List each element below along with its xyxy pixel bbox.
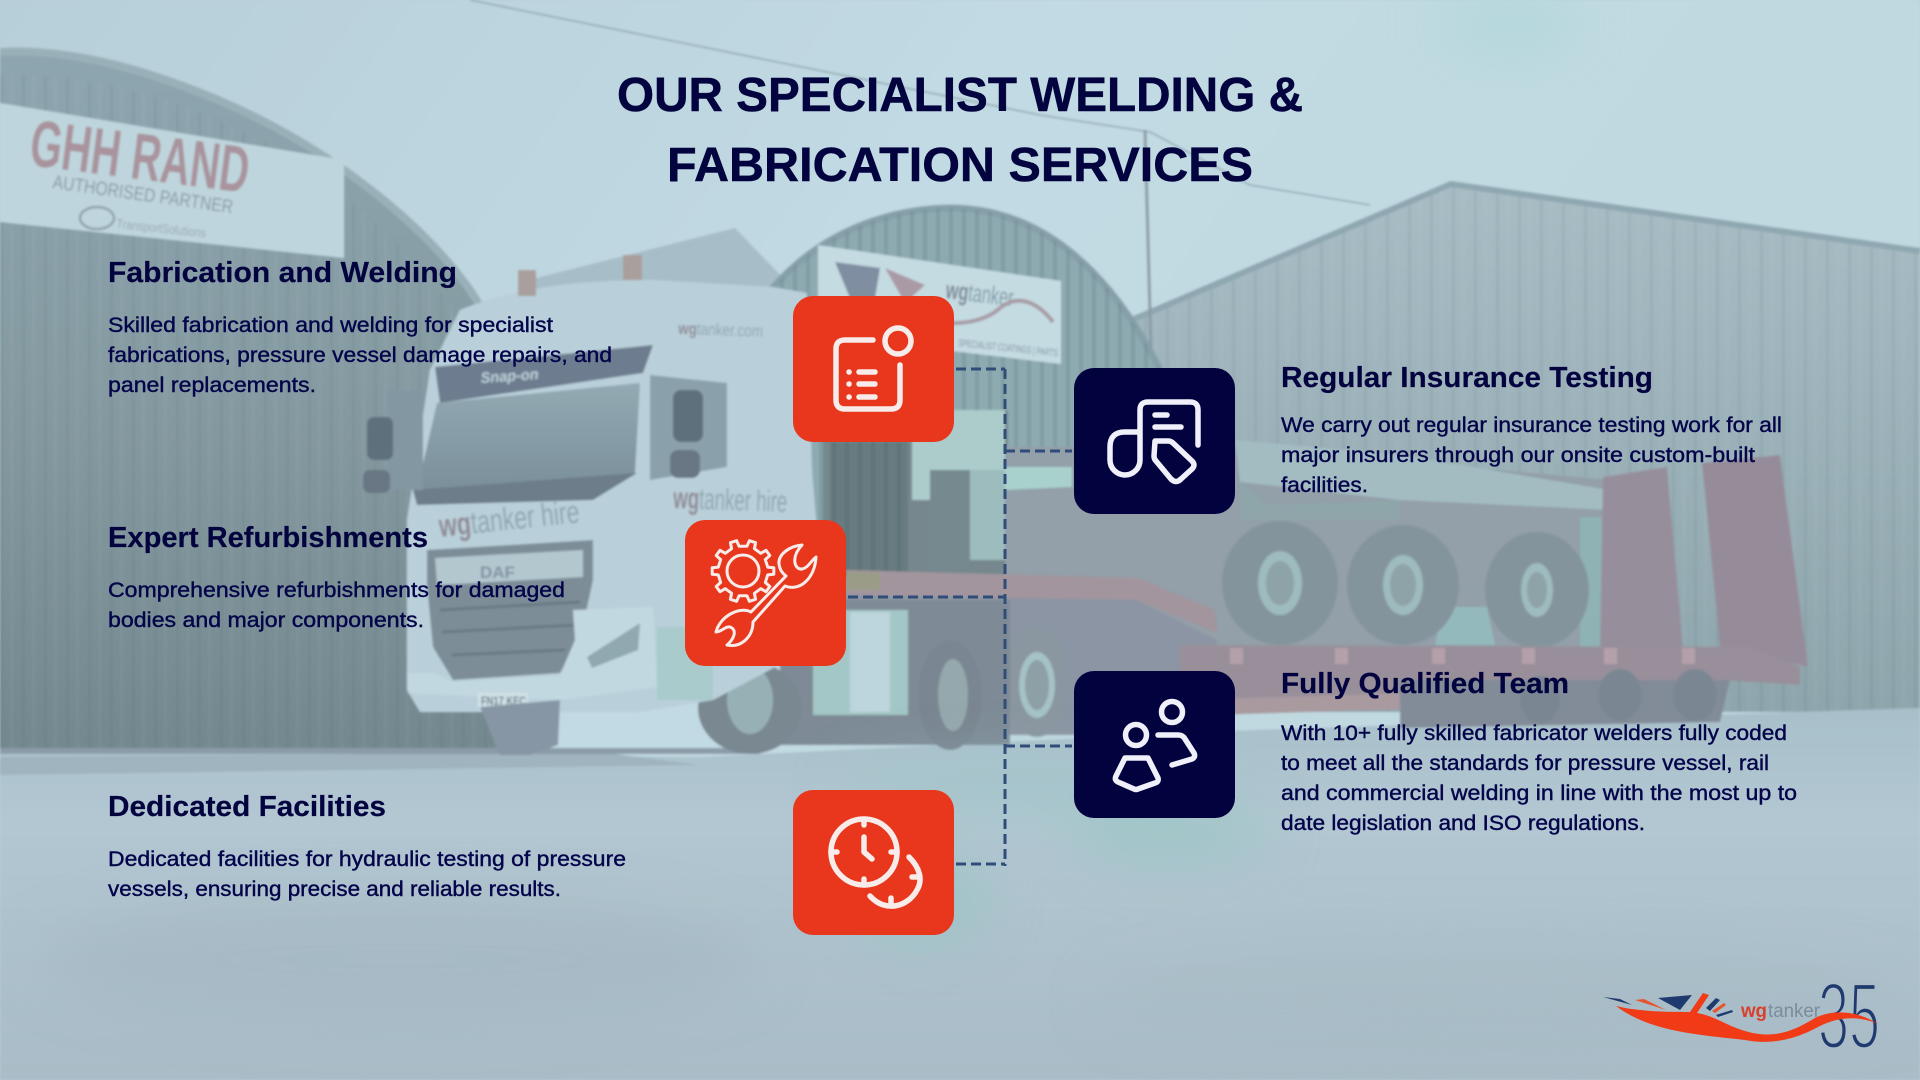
truck cab: DAF [480, 563, 515, 582]
overhead wires [470, 0, 1370, 205]
sun visor [435, 345, 653, 403]
front wheel [480, 700, 560, 755]
logo flag shards [1603, 995, 1733, 1017]
cab shell [407, 280, 826, 712]
description: bodies and major components. [108, 609, 424, 632]
vehicle wheels [1222, 521, 1338, 645]
central sign [818, 245, 1061, 364]
cab lettering: wgtanker hire [436, 493, 581, 544]
description: vessels, ensuring precise and reliable results. [108, 878, 561, 901]
right building [1120, 184, 1920, 712]
left mirrors [387, 390, 423, 490]
lower side panel [657, 627, 713, 700]
heading: Dedicated Facilities [108, 791, 386, 823]
truck cab: wgtanker hire [672, 482, 788, 519]
icon: clocks on red tile [793, 790, 954, 935]
mint gaps behind wheels [1435, 607, 1495, 645]
service: Fabrication and Welding [108, 257, 612, 397]
description: facilities. [1281, 474, 1368, 497]
loading ramps [1600, 467, 1683, 647]
icon: document and tag on navy tile [1074, 368, 1235, 514]
description: panel replacements. [108, 374, 316, 397]
GHH Rand sign [0, 103, 344, 258]
description [1281, 414, 1782, 497]
GHH Rand sign: AUTHORISED PARTNER [51, 172, 234, 218]
description: Dedicated facilities for hydraulic testing of pressure [108, 848, 626, 871]
description: Skilled fabrication and welding for specialist [108, 314, 553, 337]
gooseneck and deck [846, 570, 1217, 633]
central sign: wgtanker [944, 276, 1015, 312]
description: fabrications, pressure vessel damage repairs, and [108, 344, 612, 367]
sky [0, 0, 1920, 800]
icon: two people on navy tile [1074, 671, 1235, 818]
title: OUR SPECIALIST WELDING & [617, 69, 1303, 122]
truck cab: Snap-on [480, 366, 539, 387]
logo: wgtanker 35 [1603, 963, 1880, 1068]
description: We carry out regular insurance testing work for all [1281, 414, 1782, 437]
title [617, 69, 1303, 192]
logo swoosh [1616, 993, 1878, 1042]
grille [427, 540, 593, 680]
truck cab [363, 280, 826, 755]
description: date legislation and ISO regulations. [1281, 812, 1645, 835]
description: and commercial welding in line with the most up to [1281, 782, 1797, 805]
central arch building [520, 208, 1160, 600]
GHH Rand sign: TransportSolutions [116, 216, 207, 240]
title: FABRICATION SERVICES [667, 139, 1253, 192]
depot doorway [823, 410, 1008, 577]
door window and mirror [650, 375, 727, 480]
dashed connector lines [848, 369, 1072, 866]
ground [0, 708, 1920, 1080]
icon: gear and wrench on red tile [685, 520, 846, 666]
heading: Fabrication and Welding [108, 257, 457, 289]
service: Fully Qualified Team [1281, 668, 1797, 835]
description: major insurers through our onsite custom-built [1281, 444, 1755, 467]
icon: document checklist on red tile [793, 296, 954, 442]
heading: Expert Refurbishments [108, 522, 428, 554]
tractor unit chassis and wheels [698, 572, 1010, 754]
vehicle body [1005, 447, 1610, 650]
description: to meet all the standards for pressure vessel, rail [1281, 752, 1769, 775]
bumper and plate [407, 607, 657, 700]
heading: Fully Qualified Team [1281, 668, 1569, 700]
service: Regular Insurance Testing [1281, 362, 1782, 497]
truck cab: wgtanker.com [677, 319, 763, 341]
windscreen [417, 383, 640, 490]
trailer with armoured vehicle [846, 440, 1808, 737]
description [1281, 722, 1797, 835]
service: Expert Refurbishments [108, 522, 565, 632]
GHH Rand sign: GHH RAND [26, 105, 254, 207]
description [108, 314, 612, 397]
heading: Regular Insurance Testing [1281, 362, 1653, 394]
service: Dedicated Facilities [108, 791, 626, 901]
logo: wgtanker 35: tanker [1768, 1001, 1821, 1022]
amber roof beacons [518, 255, 642, 296]
central sign: SPECIALIST COATINGS | PARTS [958, 338, 1059, 359]
description [108, 579, 565, 632]
trailer wheels [1005, 627, 1069, 737]
logo anniversary number: 35 [1818, 963, 1880, 1068]
description: With 10+ fully skilled fabricator welders fully coded [1281, 722, 1787, 745]
truck cab: FN17 KEC [481, 694, 526, 708]
logo wordmark: wg [1740, 1001, 1767, 1022]
description [108, 848, 626, 901]
description: Comprehensive refurbishments for damaged [108, 579, 565, 602]
pole [1145, 130, 1151, 350]
left arch building [0, 52, 520, 752]
